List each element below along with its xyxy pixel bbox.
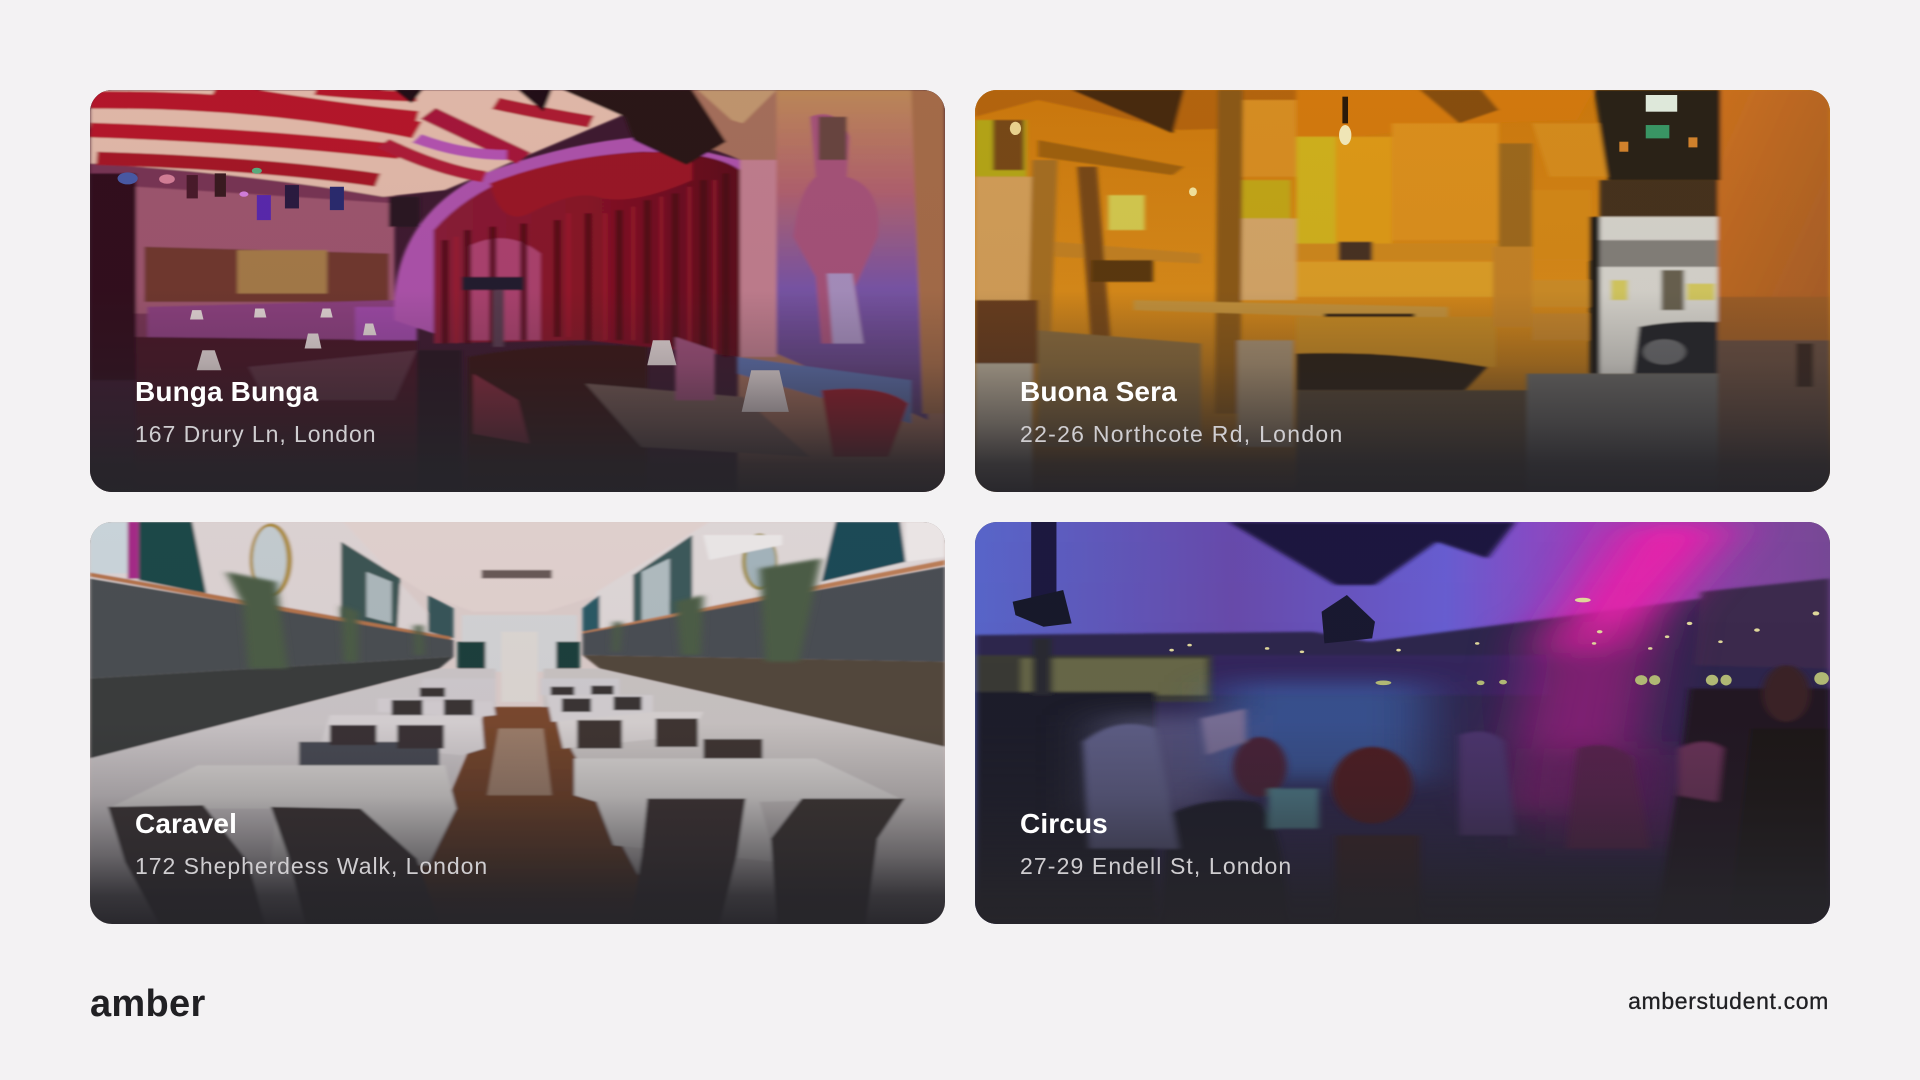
panel: Buona Sera venue card xyxy=(975,90,1830,492)
address: 167 Drury Ln, London xyxy=(135,421,376,447)
heading: venue name: Buona Sera xyxy=(1020,376,1177,407)
gradient overlay xyxy=(90,90,945,492)
light beams xyxy=(1100,522,1735,849)
photo: crowd in a club with pink and blue stage lights xyxy=(975,522,1830,924)
text block: venue name and address xyxy=(1020,376,1344,447)
gradient overlay xyxy=(975,522,1830,924)
icon group: hanging plants xyxy=(226,558,821,668)
gradient overlay xyxy=(90,522,945,924)
photo: dining room on a narrow boat xyxy=(90,522,945,924)
heading: venue name: Caravel xyxy=(135,808,237,839)
icon group: exit signs and pendant bulb xyxy=(1010,95,1697,196)
icon group: table lamps xyxy=(190,309,789,412)
panel: Bunga Bunga venue card xyxy=(90,90,945,492)
icon group: stage lights xyxy=(118,168,344,220)
heading: venue name: Bunga Bunga xyxy=(135,376,318,407)
heading: venue name: Circus xyxy=(1020,808,1108,839)
people silhouettes xyxy=(1083,665,1830,924)
logo: amber wordmark: amber xyxy=(90,983,206,1025)
address: 27-29 Endell St, London xyxy=(1020,853,1292,879)
panel: Circus venue card xyxy=(975,522,1830,924)
text block: venue name and address xyxy=(1020,808,1292,879)
gradient overlay xyxy=(975,90,1830,492)
text block: venue name and address xyxy=(135,808,488,879)
icon group: stage speakers and fairy lights xyxy=(1013,522,1829,685)
text block: venue name and address xyxy=(135,376,376,447)
address: 172 Shepherdess Walk, London xyxy=(135,853,488,879)
photo: orange-lit restaurant with bunk booths xyxy=(975,90,1830,492)
photo: theatre restaurant with striped ceiling and red curtain xyxy=(90,90,945,492)
address: 22-26 Northcote Rd, London xyxy=(1020,421,1344,447)
website url: amberstudent.com xyxy=(1628,988,1829,1014)
panel: Caravel venue card xyxy=(90,522,945,924)
